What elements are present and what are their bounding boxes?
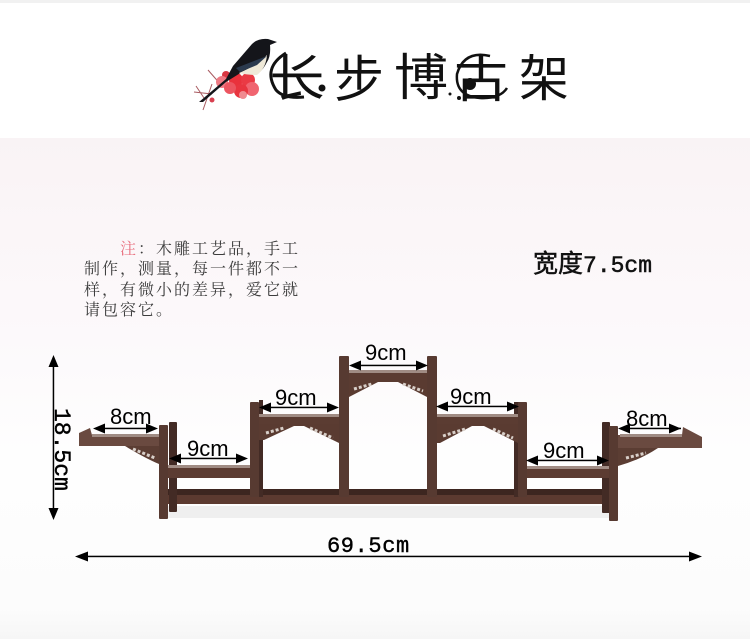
label: total width: 69.5cm (327, 534, 410, 559)
label: 9cm top: 9cm (365, 340, 407, 365)
note text: 请包容它。 (84, 302, 174, 319)
note text: 样，有微小的差异，爱它就 (84, 282, 300, 299)
shelf tier 1 left (79, 428, 159, 464)
label: 9cm tier 2: 9cm (187, 436, 229, 461)
floor shadow (160, 506, 610, 518)
shelf tier 5 right (437, 414, 518, 443)
arrow: tier 4 (349, 360, 428, 370)
arrow: tier 6 (526, 456, 609, 466)
back posts (169, 400, 610, 513)
ink ring and splatter (269, 52, 508, 100)
arrow: tier 2 (169, 454, 248, 464)
shelf tier 6 right (527, 466, 609, 478)
top strip (0, 0, 750, 3)
label: 9cm tier 3: 9cm (275, 385, 317, 410)
label: 9cm tier 6: 9cm (543, 438, 585, 463)
title: 长步博古架: 古 (454, 40, 508, 112)
label: 8cm right: 8cm (626, 406, 668, 431)
arrow: total width (75, 552, 702, 562)
arrow: height (48, 355, 58, 520)
title: 长步博古架: 长 (270, 39, 324, 111)
shelf tier 7 right (618, 427, 702, 466)
width label: 宽度7.5cm (533, 251, 652, 280)
shelf tier 3 left (259, 414, 339, 443)
icon: magpie on plum blossom (194, 38, 277, 110)
note text: 制作，测量，每一件都不一 (84, 261, 300, 278)
title: 长步博古架 (270, 38, 569, 112)
label: 9cm tier 5: 9cm (450, 384, 492, 409)
label: 8cm left: 8cm (110, 404, 152, 429)
note text: 注：木雕工艺品，手工 (120, 241, 300, 258)
brand logo (194, 38, 569, 112)
title: 长步博古架: 架 (519, 39, 569, 111)
photo background panel (0, 138, 750, 639)
arrow: tier 5 (436, 402, 519, 412)
shelf tier 2 left (168, 465, 250, 478)
arrow: tier 1 (93, 424, 158, 434)
arrow: tier 3 (259, 402, 339, 412)
arrow: tier 7 (618, 424, 681, 434)
label: height: 18.5cm (48, 408, 74, 491)
title: 长步博古架: 博 (394, 38, 448, 110)
note text (84, 240, 300, 319)
title: 长步博古架: 步 (334, 40, 384, 112)
front posts (159, 356, 618, 521)
base rails (168, 489, 604, 504)
shelf tier 4 top (349, 370, 427, 397)
